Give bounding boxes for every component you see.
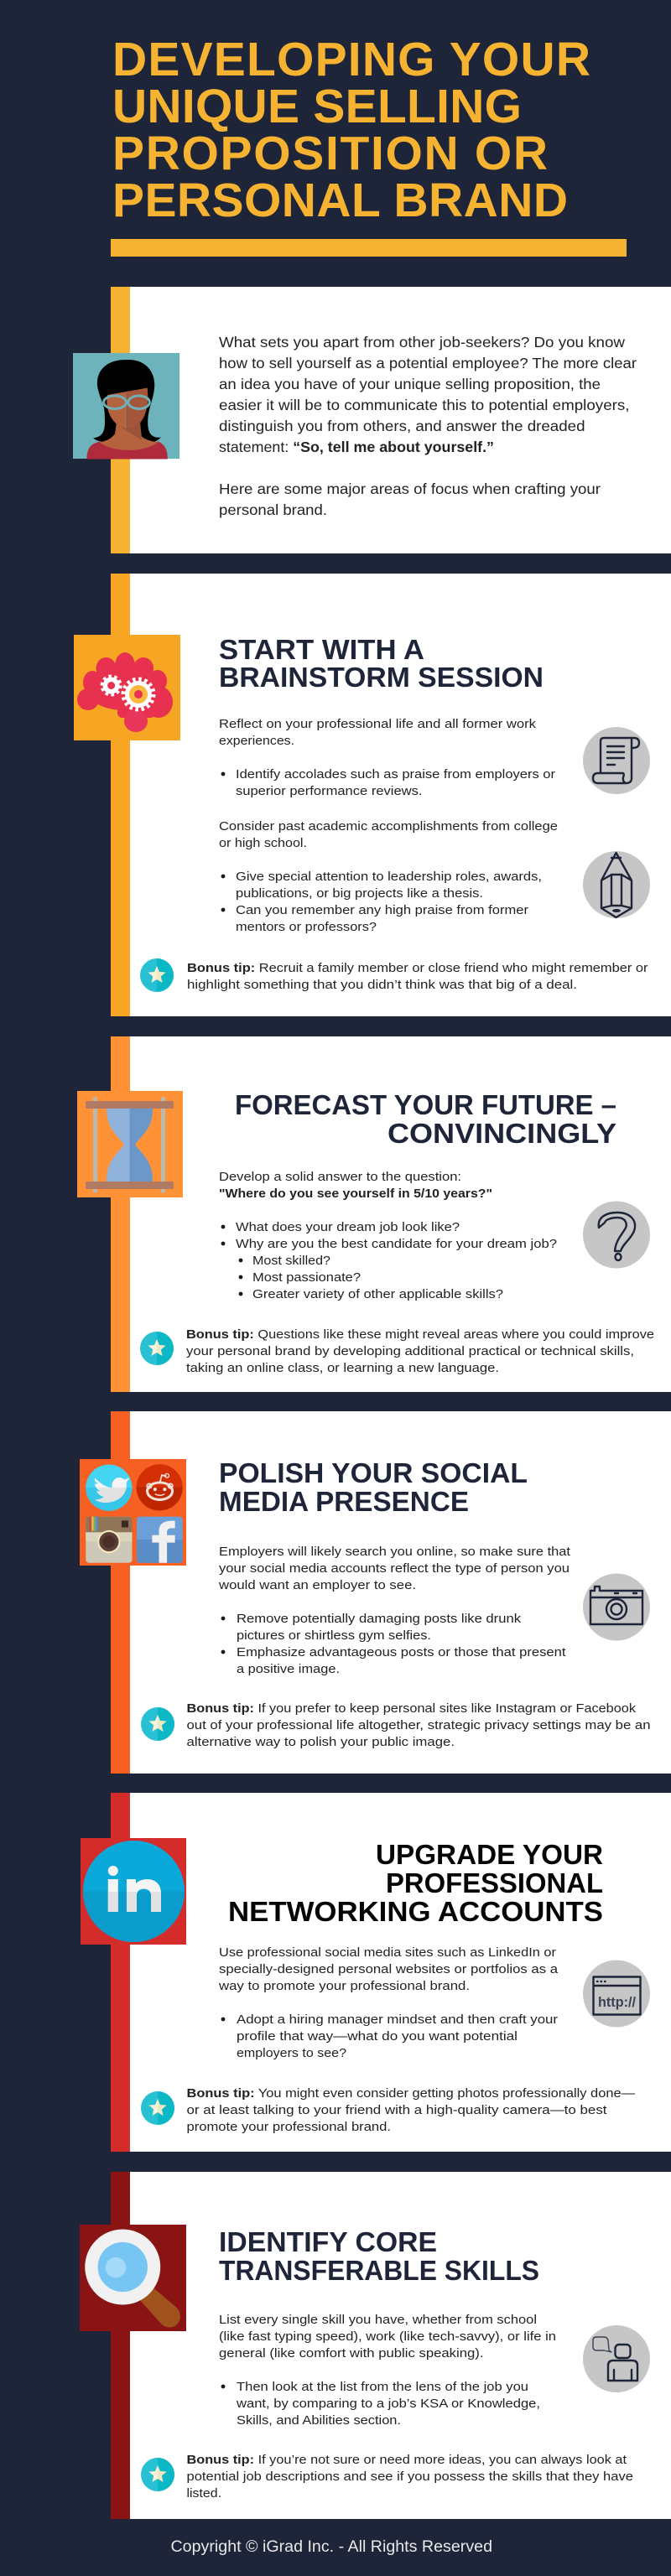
body text — [219, 717, 558, 934]
body text: Can you remember any high praise from former — [236, 903, 528, 917]
body text: Identify accolades such as praise from employers or — [236, 767, 555, 782]
intro text: Here are some major areas of focus when crafting your — [219, 480, 601, 497]
body text: Most passionate? — [252, 1270, 361, 1285]
body text: List every single skill you have, whether from school — [219, 2313, 537, 2327]
body text: (like fast typing speed), work (like tech-savvy), or life in — [219, 2329, 556, 2344]
heading: TRANSFERABLE SKILLS — [219, 2255, 539, 2286]
panel: professional networking accounts — [81, 1793, 671, 2152]
bonus tip — [140, 958, 648, 992]
icon: hourglass — [77, 1091, 183, 1197]
heading — [219, 2226, 539, 2286]
body text: mentors or professors? — [236, 920, 377, 934]
heading: FORECAST YOUR FUTURE – — [235, 1089, 616, 1120]
body text: Why are you the best candidate for your dream job? — [236, 1237, 557, 1251]
body text: Reflect on your professional life and all former work — [219, 717, 537, 731]
intro text: easier it will be to communicate this to potential employers, — [219, 397, 629, 413]
heading: IDENTIFY CORE — [219, 2226, 437, 2257]
heading: MEDIA PRESENCE — [219, 1486, 469, 1517]
body text: Remove potentially damaging posts like drunk — [237, 1612, 522, 1626]
bonus tip: Bonus tip: Questions like these might reveal areas where you could improve — [186, 1327, 654, 1342]
panel: polish social media — [80, 1411, 671, 1774]
body text: employers to see? — [237, 2046, 346, 2060]
panel: introduction — [73, 287, 671, 553]
intro text: What sets you apart from other job-seekers? Do you know — [219, 334, 625, 351]
intro text: an idea you have of your unique selling proposition, the — [219, 376, 601, 392]
bonus tip — [141, 2453, 633, 2501]
icon: LinkedIn — [81, 1838, 186, 1945]
heading: CONVINCINGLY — [388, 1118, 616, 1149]
footer copyright: Copyright © iGrad Inc. - All Rights Reserved — [171, 2538, 492, 2556]
bonus tip: Bonus tip: Recruit a family member or close friend who might remember or — [187, 961, 648, 975]
icon: star badge — [141, 1707, 174, 1741]
icon: brain with gears — [74, 635, 180, 740]
body text: or high school. — [219, 836, 307, 850]
body text: Greater variety of other applicable skills? — [252, 1287, 503, 1301]
body text: publications, or big projects like a thesis. — [236, 886, 483, 901]
body text: would want an employer to see. — [218, 1578, 416, 1592]
title: UNIQUE SELLING — [112, 80, 522, 133]
icon: pencil — [583, 851, 650, 918]
icon: social media grid — [80, 1459, 186, 1566]
body text: Skills, and Abilities section. — [237, 2413, 401, 2428]
body text — [219, 1170, 557, 1301]
bonus tip: highlight something that you didn’t think was that big of a deal. — [187, 978, 577, 992]
bonus tip — [141, 2086, 635, 2134]
intro text: distinguish you from others, and answer the dreaded — [219, 418, 585, 434]
body text: Emphasize advantageous posts or those that present — [237, 1645, 566, 1659]
icon: scroll — [583, 727, 650, 794]
bonus tip: Bonus tip: You might even consider getting photos professionally done— — [186, 2086, 635, 2101]
bonus tip — [141, 1701, 651, 1749]
icon: person speaking — [583, 2325, 650, 2392]
heading — [228, 1839, 603, 1927]
body text: Consider past academic accomplishments from college — [219, 819, 558, 834]
body text: Use professional social media sites such as LinkedIn or — [219, 1945, 556, 1960]
body text: way to promote your professional brand. — [218, 1979, 470, 1993]
heading: START WITH A — [219, 634, 424, 665]
icon: camera — [583, 1573, 650, 1640]
panel: forecast your future — [77, 1036, 671, 1392]
body text: Give special attention to leadership roles, awards, — [236, 870, 542, 884]
bonus tip: Bonus tip: If you prefer to keep personal sites like Instagram or Facebook — [186, 1701, 637, 1716]
bonus tip: potential job descriptions and see if you possess the skills that they have — [186, 2470, 633, 2484]
bonus tip: taking an online class, or learning a new language. — [186, 1361, 499, 1375]
body text: your social media accounts reflect the type of person you — [219, 1561, 570, 1576]
icon: star badge — [140, 958, 174, 992]
icon: magnifying glass — [80, 2225, 186, 2331]
icon: browser window — [583, 1961, 650, 2028]
icon: star badge — [140, 1332, 174, 1365]
title — [112, 33, 590, 227]
heading — [219, 1457, 528, 1517]
intro text — [219, 334, 637, 518]
panel: brainstorm session — [74, 574, 671, 1016]
body text: What does your dream job look like? — [236, 1220, 460, 1234]
icon: woman avatar — [73, 353, 179, 460]
heading: BRAINSTORM SESSION — [219, 662, 544, 693]
bonus tip: your personal brand by developing additional practical or technical skills, — [186, 1344, 634, 1358]
bonus tip — [140, 1327, 654, 1375]
heading — [235, 1089, 616, 1149]
body text: Most skilled? — [252, 1254, 330, 1268]
bonus tip: promote your professional brand. — [186, 2120, 391, 2134]
body text: profile that way—what do you want potential — [237, 2029, 518, 2044]
title: PROPOSITION OR — [112, 127, 548, 180]
body text: experiences. — [219, 734, 294, 748]
body text: general (like comfort with public speaking). — [219, 2346, 483, 2360]
body text: Then look at the list from the lens of the job you — [237, 2380, 528, 2394]
heading: UPGRADE YOUR — [376, 1839, 603, 1870]
body text: want, by comparing to a job’s KSA or Knowledge, — [236, 2397, 540, 2411]
icon: question mark — [583, 1201, 650, 1268]
heading: NETWORKING ACCOUNTS — [228, 1896, 603, 1927]
heading: POLISH YOUR SOCIAL — [219, 1457, 528, 1488]
icon: browser window: http:// — [598, 1994, 636, 2010]
body text — [219, 2313, 556, 2428]
bonus tip: Bonus tip: If you’re not sure or need more ideas, you can always look at — [186, 2453, 627, 2467]
body text: pictures or shirtless gym selfies. — [237, 1628, 431, 1643]
bonus tip: out of your professional life altogether, strategic privacy settings may be an — [186, 1718, 651, 1732]
icon: star badge — [141, 2458, 174, 2491]
title underline bar — [111, 239, 627, 257]
body text: Adopt a hiring manager mindset and then craft your — [237, 2012, 558, 2027]
intro text: how to sell yourself as a potential employee? The more clear — [219, 355, 637, 371]
bonus tip: listed. — [186, 2486, 221, 2501]
body text: a positive image. — [237, 1662, 340, 1676]
bonus tip: alternative way to polish your public image. — [186, 1735, 455, 1749]
intro text: statement: “So, tell me about yourself.” — [219, 439, 494, 455]
panel: core transferable skills — [80, 2172, 671, 2519]
body text — [218, 1545, 571, 1676]
heading — [219, 634, 544, 693]
body text — [218, 1945, 559, 2060]
body text: specially-designed personal websites or portfolios as a — [219, 1962, 559, 1976]
body text: "Where do you see yourself in 5/10 years?" — [219, 1187, 492, 1201]
bonus tip: or at least talking to your friend with a high-quality camera—to best — [186, 2103, 607, 2117]
title: PERSONAL BRAND — [112, 174, 568, 227]
icon: star badge — [141, 2091, 174, 2125]
intro text: personal brand. — [219, 501, 327, 518]
title: DEVELOPING YOUR — [112, 33, 590, 86]
heading: PROFESSIONAL — [386, 1867, 603, 1898]
body text: Employers will likely search you online, so make sure that — [219, 1545, 571, 1559]
body text: Develop a solid answer to the question: — [219, 1170, 461, 1184]
body text: superior performance reviews. — [236, 784, 423, 798]
